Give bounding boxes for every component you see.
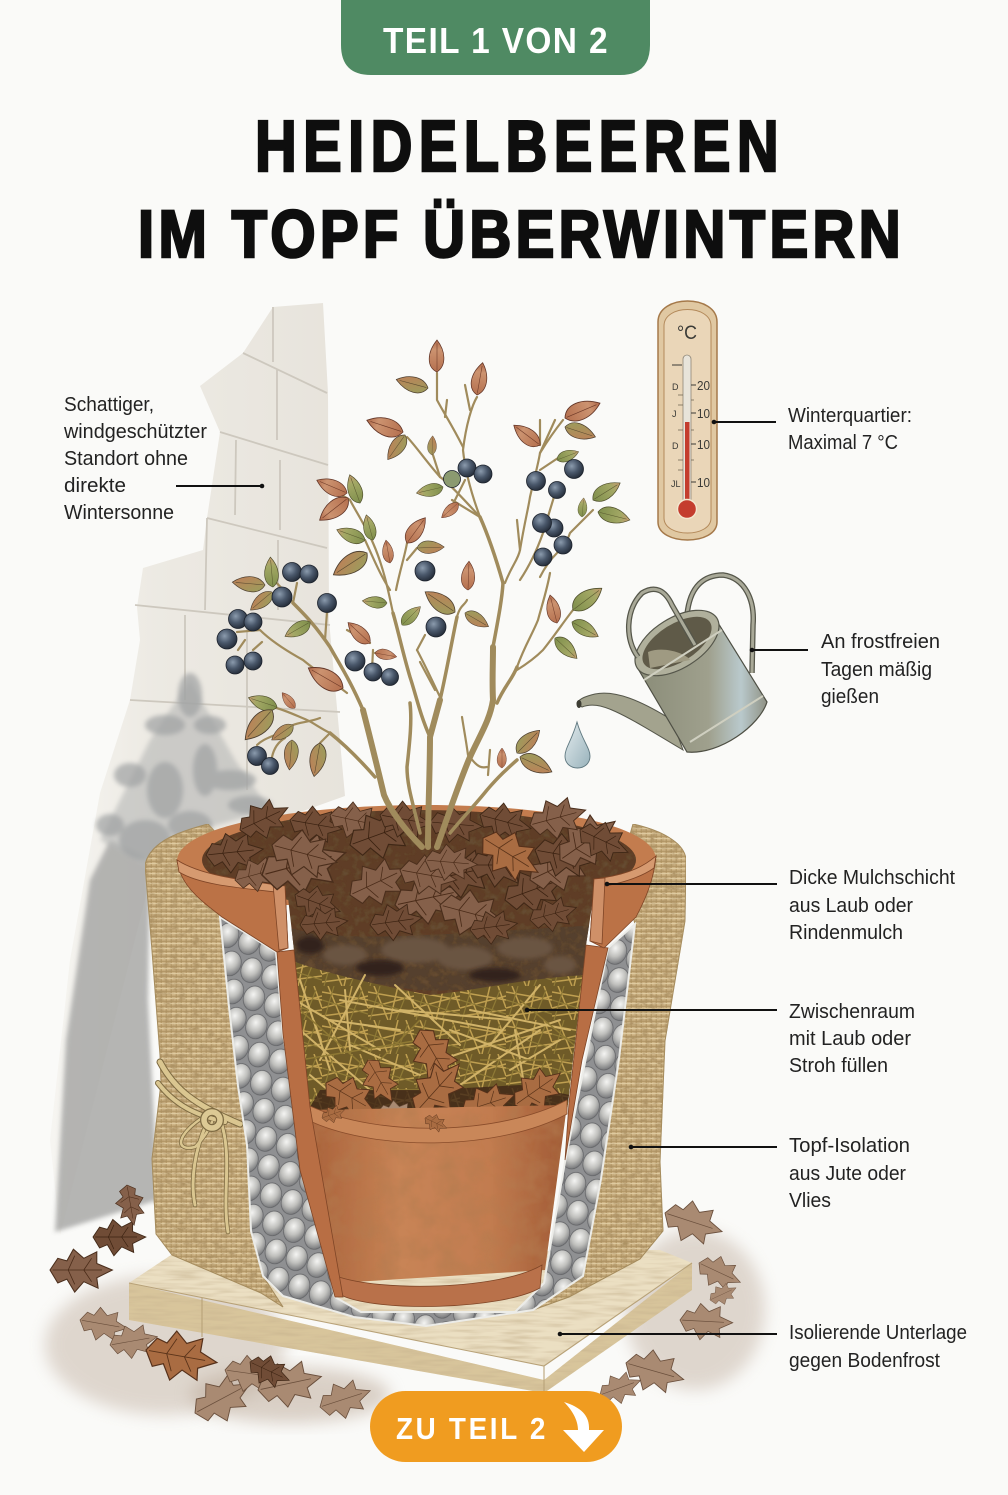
icon: thermometer: J <box>672 409 676 419</box>
top banner: part 1 of 2: TEIL 1 VON 2 <box>383 20 609 61</box>
label: base <box>558 1322 967 1372</box>
label: location: Schattiger, <box>64 394 154 416</box>
label: gap filling: mit Laub oder <box>789 1028 911 1050</box>
label: pot insulation: aus Jute oder <box>789 1163 906 1185</box>
label: mulch <box>605 867 955 944</box>
icon: watering can <box>576 575 767 752</box>
blueberry plant <box>217 340 632 847</box>
leaves at bottom of fill <box>310 1030 569 1110</box>
icon: thermometer: 10 <box>697 438 710 452</box>
label: location: direkte <box>64 475 126 497</box>
label: base: gegen Bodenfrost <box>789 1350 940 1372</box>
icon: thermometer: JL <box>671 479 681 489</box>
label: watering: An frostfreien <box>821 631 940 653</box>
label: mulch: Dicke Mulchschicht <box>789 867 955 889</box>
label: base: Isolierende Unterlage <box>789 1322 967 1344</box>
label: location <box>63 394 264 524</box>
title <box>138 107 905 272</box>
label: watering <box>750 631 940 708</box>
label: watering: Tagen mäßig <box>821 659 932 681</box>
label: location: Wintersonne <box>64 502 174 524</box>
button: to part 2: ZU TEIL 2 <box>396 1411 548 1446</box>
pot contents fill behind <box>202 810 636 1115</box>
ground leaf litter <box>45 1183 765 1433</box>
label: pot insulation: Vlies <box>789 1190 831 1212</box>
icon: thermometer: 10 <box>697 407 710 421</box>
label: location: Standort ohne <box>64 448 188 470</box>
icon: thermometer: 10 <box>697 476 710 490</box>
top banner: part 1 of 2 <box>341 0 650 75</box>
wall with shadow <box>50 303 345 1235</box>
label: gap filling: Zwischenraum <box>789 1001 915 1023</box>
wooden insulating base <box>129 1250 692 1393</box>
pot back rim <box>177 805 656 905</box>
straw fill layer <box>296 962 582 1110</box>
label: mulch: aus Laub oder <box>789 895 913 917</box>
title: HEIDELBEEREN <box>255 107 785 187</box>
jute wrap <box>145 824 686 1310</box>
leaves <box>232 340 632 779</box>
icon: thermometer: 20 <box>697 379 710 393</box>
label: winter quarters: Maximal 7 °C <box>788 432 898 454</box>
bubble wrap layer <box>220 917 635 1326</box>
icon: thermometer: °C <box>677 323 697 344</box>
rope knot <box>158 1062 240 1232</box>
icon: thermometer: D <box>672 441 679 451</box>
label: gap filling <box>525 1001 915 1077</box>
label: winter quarters: Winterquartier: <box>788 405 912 427</box>
label: mulch: Rindenmulch <box>789 922 903 944</box>
cut clay walls <box>177 856 656 1297</box>
mulch leaves <box>204 792 635 947</box>
button: to part 2 <box>370 1391 622 1462</box>
label: watering: gießen <box>821 686 879 708</box>
branches <box>237 373 593 847</box>
berries <box>217 459 584 774</box>
icon: water drop <box>565 722 590 768</box>
label: location: windgeschützter <box>63 421 207 443</box>
label: winter quarters <box>712 405 912 454</box>
icon: thermometer <box>658 301 717 540</box>
label: pot insulation: Topf-Isolation <box>789 1135 910 1157</box>
title: IM TOPF ÜBERWINTERN <box>138 197 905 272</box>
inner pot <box>310 1100 567 1306</box>
label: gap filling: Stroh füllen <box>789 1055 888 1077</box>
soil layer <box>280 925 600 991</box>
label: pot insulation <box>629 1135 910 1212</box>
icon: thermometer: D <box>672 382 679 392</box>
